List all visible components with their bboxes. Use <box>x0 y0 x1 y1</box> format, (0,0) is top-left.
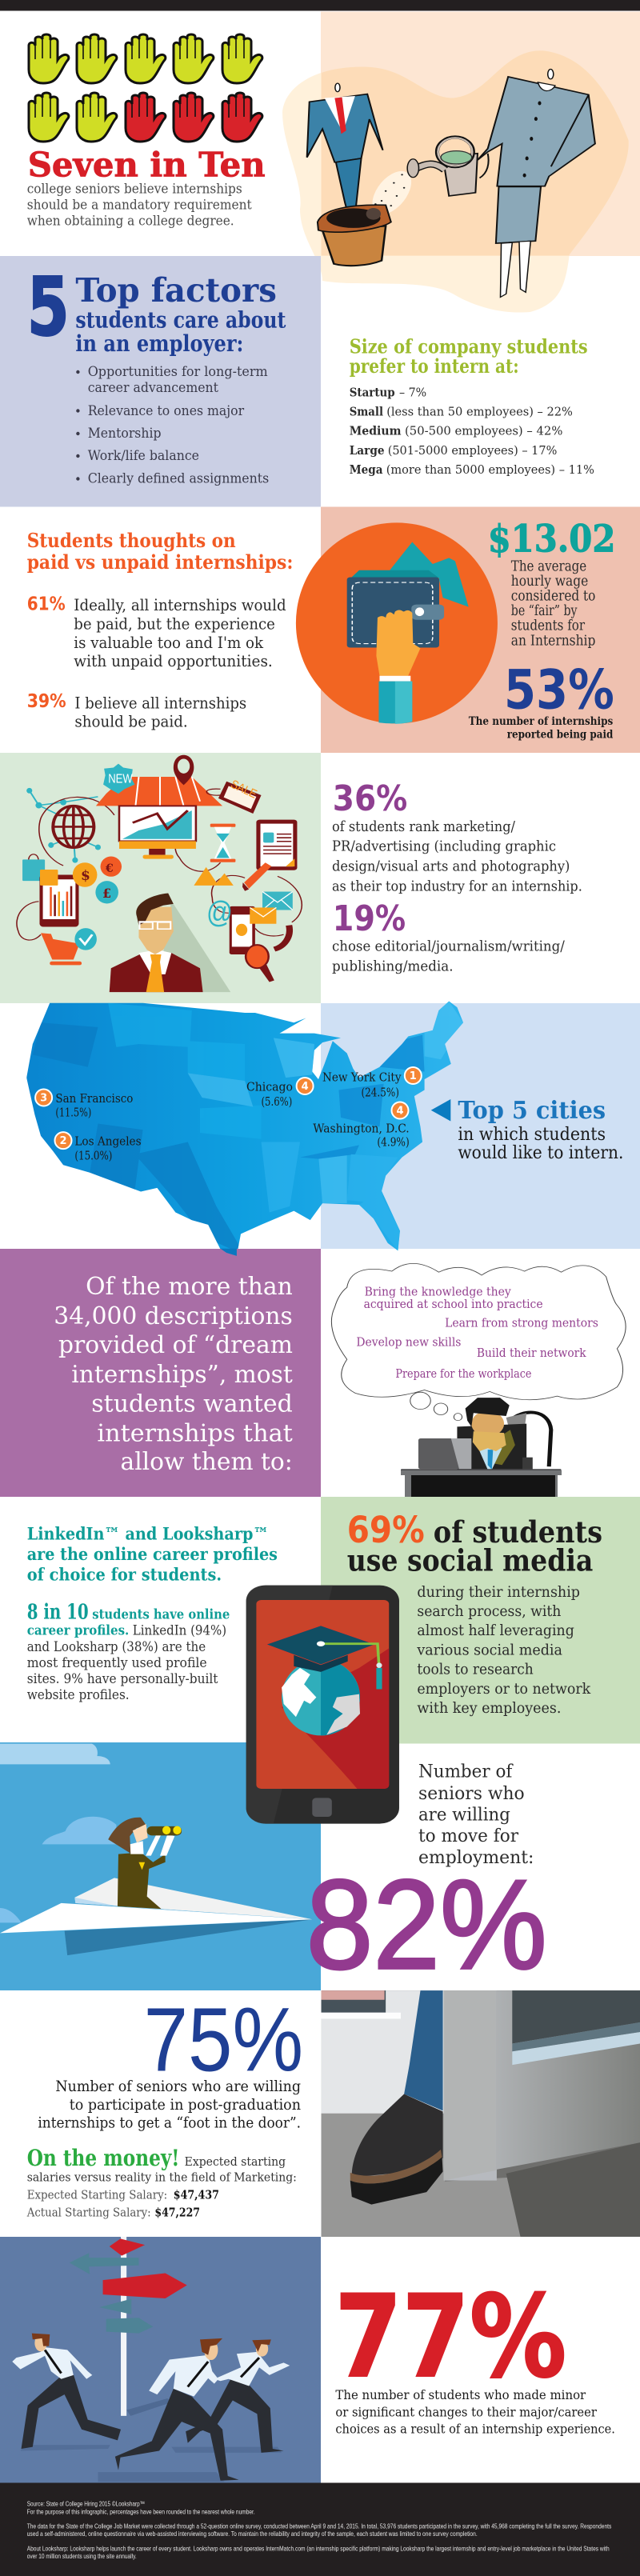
stat: 61 percent: be paid, but the experience <box>74 614 275 634</box>
illustration: suit plant and woman watering <box>282 50 629 313</box>
text: on the money <box>26 2145 297 2220</box>
list: factors: Relevance to ones major <box>88 403 245 419</box>
panel: wages <box>296 507 640 753</box>
heading: five top factors: 5 <box>27 259 70 354</box>
heading: five top factors <box>27 259 286 357</box>
list: factors <box>76 364 269 487</box>
panel: seven in ten <box>27 34 266 230</box>
stat: 39 percent <box>27 691 246 731</box>
heading: linkedin and looksharp: of choice for students. <box>27 1565 222 1584</box>
list: company sizes: – 7% <box>399 386 426 400</box>
stat: hourly wage: be “fair” by <box>511 603 578 619</box>
text: on the money: salaries versus reality in the field of Marketing: <box>27 2170 297 2185</box>
panel: dream internships <box>0 1249 321 1497</box>
icon text: new, sale, at: £ <box>102 886 111 901</box>
stat: 19 percent: chose editorial/journalism/writing/ <box>332 938 566 954</box>
footer text: For the purpose of this infographic, percentages have been rounded to the nearest whole number. <box>27 2507 255 2515</box>
text: on the money: $47,227 <box>154 2206 200 2220</box>
blue background <box>0 1742 321 1990</box>
text: social media usage: with key employees. <box>417 1700 561 1717</box>
map shape <box>16 998 474 1258</box>
runner left <box>12 2334 121 2449</box>
text: dream internships: Of the more than <box>86 1273 293 1301</box>
panel: thought cloud <box>331 1263 626 1497</box>
illustration: woman on paper plane <box>0 1744 312 1955</box>
text: major changes: choices as a result of an internship experience. <box>335 2422 615 2437</box>
salmon background <box>321 507 640 753</box>
panel: company size <box>350 335 594 477</box>
desk <box>401 1470 562 1497</box>
stat: 61 percent: Ideally, all internships would <box>74 595 286 614</box>
green background <box>321 1497 640 1744</box>
map: United States <box>16 998 474 1258</box>
icon text: new, sale, at: SALE <box>229 778 259 802</box>
panel: online profiles <box>27 1523 278 1703</box>
cloud text: Develop new skills <box>356 1337 461 1350</box>
text: social media usage <box>416 1584 591 1717</box>
panel: paid vs unpaid <box>27 529 293 731</box>
city labels: (24.5%) <box>362 1085 399 1099</box>
icon text: new, sale, at: @ <box>206 896 233 930</box>
text: dream internships <box>54 1273 293 1476</box>
icon text: new, sale, at: NEW <box>108 773 134 786</box>
heading: top 5 cities: would like to intern. <box>458 1143 623 1163</box>
text: post-graduation internships: Number of seniors who are willing <box>55 2078 301 2095</box>
stat: 19 percent: publishing/media. <box>332 958 453 974</box>
heading: five top factors: Top factors <box>75 271 277 310</box>
text: on the money: Actual Starting Salary: <box>26 2206 151 2220</box>
stat: 36 percent: as their top industry for an internship. <box>332 878 582 895</box>
cloud text: acquired at school into practice <box>364 1298 543 1311</box>
stat: 61 percent: 61% <box>27 594 66 614</box>
footer text: over 10 million students using the site annually. <box>27 2552 137 2560</box>
illustration: marketing icons <box>17 755 302 992</box>
text: post-graduation internships: internships to get a “foot in the door”. <box>38 2114 301 2132</box>
heading: linkedin and looksharp: are the online career profiles <box>27 1544 278 1564</box>
text: on the money: Expected starting <box>185 2154 286 2169</box>
footer text: Source: State of College Hiring 2015 ©Looksharp™ <box>27 2500 145 2508</box>
heading: size of company <box>350 335 588 378</box>
stat: hourly wage: The average <box>511 558 586 574</box>
stat: 19 percent: 19% <box>333 898 406 939</box>
runner right <box>186 2339 290 2453</box>
text: dream internships: provided of “dream <box>58 1331 293 1359</box>
text: social media usage: various social media <box>416 1642 562 1659</box>
heading: top 5 cities <box>431 1097 623 1163</box>
stat: move for employment <box>306 1762 547 1995</box>
cloud text: Prepare for the workplace <box>395 1368 531 1381</box>
city labels: Washington, D.C. <box>313 1121 410 1135</box>
stat: 61 percent: with unpaid opportunities. <box>74 651 273 670</box>
illustration: signpost and runners <box>12 2237 290 2482</box>
list: factors: Opportunities for long-term <box>88 364 268 380</box>
list: company sizes <box>350 386 594 477</box>
text: major changes <box>335 2387 615 2437</box>
heading: five top factors: in an employer: <box>75 330 243 357</box>
city markers <box>35 1067 422 1149</box>
panel: paper plane scene <box>0 1742 321 1990</box>
list: company sizes: (more than 5000 employees) – 11% <box>386 462 594 477</box>
stat: 36 percent: design/visual arts and photography) <box>332 858 570 875</box>
list: company sizes: Mega <box>350 462 383 477</box>
panel: foot in the door <box>26 1989 303 2220</box>
city labels: (5.6%) <box>261 1094 292 1109</box>
lavender background <box>0 256 321 507</box>
number: 75 percent: 75% <box>144 1989 303 2090</box>
city markers: 3 <box>40 1093 47 1104</box>
stat: 39 percent: should be paid. <box>74 712 188 731</box>
text: seniors believe: when obtaining a college degree. <box>27 214 234 230</box>
heading: seven in ten: Seven in Ten <box>28 145 266 184</box>
text: eight in ten: LinkedIn (94%) <box>133 1623 226 1639</box>
list: company sizes: Medium <box>350 424 402 438</box>
icon: ten hands <box>29 34 262 142</box>
text: eight in ten: most frequently used profile <box>27 1655 207 1671</box>
text: eight in ten: and Looksharp (38%) are the <box>27 1639 206 1655</box>
text: number of seniors: to move for <box>418 1826 518 1846</box>
stat: 39 percent: 39% <box>27 691 66 712</box>
list: company sizes: Startup <box>350 386 395 400</box>
city labels: (4.9%) <box>377 1134 410 1149</box>
text: social media usage: search process, with <box>417 1603 561 1620</box>
heading: top 5 cities: Top 5 cities <box>458 1097 606 1125</box>
icon text: new, sale, at: € <box>105 862 114 875</box>
heading: five top factors: students care about <box>75 306 286 333</box>
footer <box>0 2483 640 2576</box>
heading: 69 percent: of students <box>434 1514 602 1550</box>
text: major changes: or significant changes to their major/career <box>335 2404 597 2419</box>
text: dream internships: internships”, most <box>71 1361 293 1389</box>
heading: 69 percent: 69% <box>347 1509 425 1551</box>
city markers: 4 <box>302 1081 309 1093</box>
city labels: New York City <box>322 1070 402 1084</box>
list: company sizes: (501-5000 employees) – 17% <box>388 443 557 458</box>
city markers: 4 <box>396 1106 404 1117</box>
list: company sizes: Small <box>350 405 383 419</box>
purple background <box>0 1249 321 1497</box>
text: post-graduation internships: to participate in post-graduation <box>70 2096 301 2114</box>
runner center <box>115 2338 238 2481</box>
heading: linkedin and looksharp <box>27 1523 278 1584</box>
text: eight in ten: sites. 9% have personally-built <box>27 1671 218 1687</box>
photo: boot in door <box>322 1990 640 2237</box>
list: company sizes: (less than 50 employees) – 22% <box>386 405 573 419</box>
city labels: (15.0%) <box>74 1148 112 1162</box>
map tip over panel <box>221 1249 237 1256</box>
top black bar <box>0 0 640 11</box>
text: number of seniors: employment: <box>418 1848 534 1868</box>
panel: top industries <box>332 778 582 974</box>
heading: linkedin and looksharp: LinkedIn™ and Looksharp™ <box>27 1523 269 1544</box>
stat: hourly wage <box>488 518 615 650</box>
heading: size of company: Size of company students <box>350 335 588 358</box>
panel: changes to career <box>334 2271 615 2437</box>
stat: hourly wage: an Internship <box>511 634 595 650</box>
text: eight in ten: website profiles. <box>27 1687 130 1703</box>
panel: marketing illustration <box>0 753 321 1003</box>
dark background <box>0 2483 640 2576</box>
stat: 53 percent: reported being paid <box>507 728 614 741</box>
city labels: San Francisco <box>55 1091 133 1106</box>
stat: 53 percent: The number of internships <box>469 715 613 728</box>
cloud text <box>356 1286 598 1381</box>
text: dream internships: internships that <box>97 1419 293 1447</box>
text: major changes: The number of students who made minor <box>335 2387 586 2402</box>
text: dream internships: students wanted <box>91 1390 293 1418</box>
text: eight in ten: 8 in 10 <box>27 1601 89 1625</box>
stat: 53 percent <box>469 659 614 741</box>
stat: 36 percent: PR/advertising (including graphic <box>332 838 556 855</box>
stat: hourly wage: $13.02 <box>488 518 615 562</box>
city labels <box>55 1070 410 1162</box>
city labels: Chicago <box>246 1080 293 1094</box>
heading: size of company: prefer to intern at: <box>350 354 519 378</box>
city markers: 1 <box>410 1070 417 1082</box>
text: eight in ten: career profiles. <box>27 1623 129 1639</box>
text: number of seniors <box>418 1762 534 1868</box>
cloud text: Build their network <box>477 1347 586 1360</box>
text: number of seniors: Number of <box>418 1762 514 1782</box>
stat: hourly wage: hourly wage <box>511 574 588 590</box>
text: seniors believe <box>27 182 252 230</box>
text: number of seniors: are willing <box>418 1805 510 1826</box>
text: post-graduation internships <box>38 2078 301 2132</box>
stat: hourly wage: students for <box>511 618 586 634</box>
heading: students thoughts: paid vs unpaid internships: <box>27 550 293 574</box>
stat: 36 percent: 36% <box>333 778 407 819</box>
list: company sizes: Large <box>350 443 385 458</box>
cloud text: Learn from strong mentors <box>445 1317 598 1330</box>
text: social media usage: tools to research <box>417 1662 534 1678</box>
panel: top factors <box>0 256 321 507</box>
list: factors: career advancement <box>88 380 218 396</box>
slate background <box>0 2237 321 2483</box>
text: social media usage: during their internship <box>417 1584 580 1601</box>
number: 77 percent: 77% <box>334 2271 566 2403</box>
text: dream internships: 34,000 descriptions <box>54 1302 293 1330</box>
panel: top cities background <box>321 1003 640 1249</box>
text: eight in ten <box>27 1601 230 1703</box>
heading: students thoughts: Students thoughts on <box>27 529 236 552</box>
text: on the money: $47,437 <box>174 2187 219 2202</box>
illustration: man at desk <box>401 1398 562 1472</box>
city labels: Los Angeles <box>74 1134 142 1149</box>
heading: students thoughts <box>27 529 293 574</box>
heading: 69 percent: use social media <box>347 1542 593 1578</box>
list: factors: Mentorship <box>88 426 162 442</box>
list: company sizes: (50-500 employees) – 42% <box>405 424 562 438</box>
footer text: used a self-administered, online questionnaire via web-assisted interviewing software. To maintain the reliability and integrity of the sample, each student was limited to one survey completion. <box>27 2530 478 2538</box>
stat: 36 percent: of students rank marketing/ <box>332 818 516 835</box>
footer text <box>27 2500 611 2560</box>
text: dream internships: allow them to: <box>120 1448 293 1476</box>
text: seniors believe: should be a mandatory requirement <box>27 198 252 214</box>
text: seniors believe: college seniors believe internships <box>27 182 242 198</box>
city labels: (11.5%) <box>55 1105 91 1119</box>
cloud <box>331 1263 626 1421</box>
text: on the money: On the money! <box>27 2145 180 2171</box>
text: eight in ten: students have online <box>92 1607 230 1623</box>
stat: 61 percent: is valuable too and I'm ok <box>74 633 264 652</box>
icon text: new, sale, at: $ <box>81 868 90 884</box>
cloud text: Bring the knowledge they <box>365 1286 512 1299</box>
heading: 69 percent <box>347 1509 602 1578</box>
stat: hourly wage: considered to <box>511 589 595 605</box>
heading: top 5 cities: in which students <box>458 1125 606 1145</box>
stat: 39 percent: I believe all internships <box>74 694 246 713</box>
text: social media usage: employers or to network <box>417 1681 591 1698</box>
stat: 19 percent <box>332 898 566 974</box>
panel: signpost and runners <box>0 2237 321 2483</box>
stat: 36 percent <box>332 778 582 895</box>
peach background <box>321 11 640 256</box>
panel: watering illustration <box>282 11 640 313</box>
icon: phone with graduation cap <box>246 1586 399 1824</box>
arrow <box>431 1099 450 1122</box>
panel: social media <box>321 1497 640 1744</box>
green background <box>0 753 321 1003</box>
city markers: 2 <box>59 1135 67 1147</box>
stat: 61 percent <box>27 594 286 670</box>
list: factors: Clearly defined assignments <box>88 471 269 487</box>
list: factors: Work/life balance <box>88 448 199 464</box>
text: social media usage: almost half leveraging <box>417 1622 574 1639</box>
icon: wallet and hand <box>296 522 498 724</box>
text: number of seniors: seniors who <box>418 1784 525 1804</box>
number: 82 percent: 82% <box>306 1853 547 1995</box>
stat: 53 percent: 53% <box>504 659 614 722</box>
icon text: new, sale, at <box>81 773 259 930</box>
text: on the money: Expected Starting Salary: <box>27 2187 167 2202</box>
